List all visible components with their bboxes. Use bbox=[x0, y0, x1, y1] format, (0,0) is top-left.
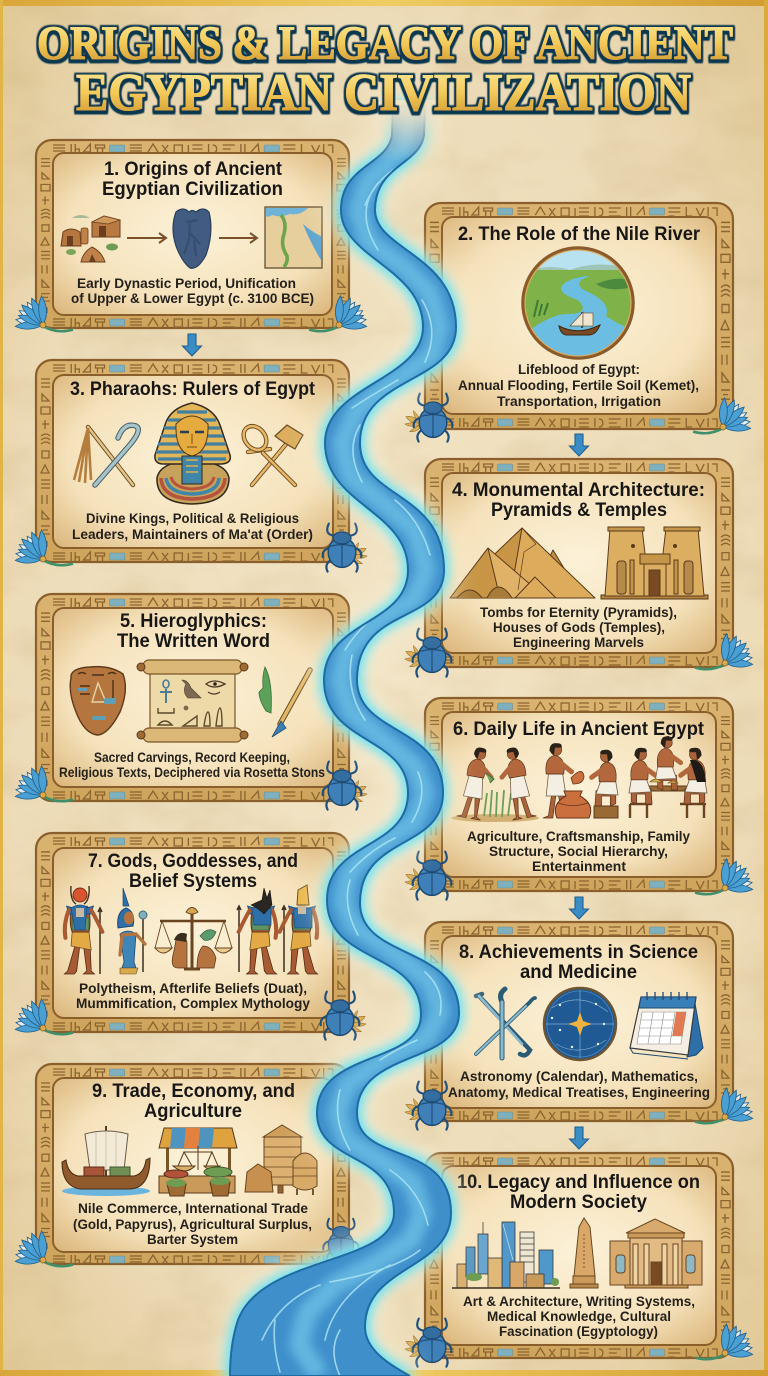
description 4: Tombs for Eternity (Pyramids), bbox=[480, 605, 677, 620]
icon: mud brick huts bbox=[61, 215, 120, 262]
description 9: (Gold, Papyrus), Agricultural Surplus, bbox=[73, 1217, 312, 1232]
heading 5: The Written Word bbox=[117, 631, 270, 652]
description 1: of Upper & Lower Egypt (c. 3100 BCE) bbox=[71, 291, 314, 306]
heading 5 bbox=[117, 611, 270, 652]
lotus 4 bbox=[695, 634, 753, 669]
panel 2: Nile river bbox=[405, 203, 751, 442]
description 2 bbox=[458, 362, 699, 409]
frame 2 bbox=[425, 203, 733, 429]
description 9: Nile Commerce, International Trade bbox=[78, 1201, 308, 1216]
description 6 bbox=[467, 829, 690, 874]
description 4: Engineering Marvels bbox=[513, 635, 644, 650]
lotus left bbox=[15, 296, 73, 331]
leaves 3 bbox=[349, 543, 367, 564]
leaves 10 bbox=[405, 1336, 423, 1357]
frame 3 bbox=[36, 360, 349, 562]
arrow 6 to 8 bbox=[570, 897, 588, 919]
lotus 6 bbox=[695, 859, 753, 894]
icon: map of the Nile bbox=[265, 207, 322, 268]
scarab 2 bbox=[414, 394, 452, 442]
lotus 10 bbox=[695, 1324, 753, 1359]
frame 8 bbox=[425, 922, 733, 1121]
description 1 bbox=[71, 276, 314, 306]
heading 5: 5. Hieroglyphics: bbox=[120, 611, 267, 632]
description 8: Anatomy, Medical Treatises, Engineering bbox=[448, 1085, 710, 1100]
panel 8: science and medicine bbox=[405, 922, 753, 1130]
heading 2: 2. The Role of the Nile River bbox=[458, 224, 701, 245]
description 5: Sacred Carvings, Record Keeping, bbox=[94, 750, 290, 765]
river top fade bbox=[372, 100, 442, 162]
description 3: Leaders, Maintainers of Ma'at (Order) bbox=[72, 527, 313, 542]
description 8 bbox=[448, 1069, 710, 1100]
description 6: Structure, Social Hierarchy, bbox=[489, 844, 668, 859]
icon: obelisk bbox=[570, 1218, 598, 1288]
icon: Narmer palette bbox=[173, 209, 211, 268]
title: EGYPTIAN CIVILIZATION bbox=[76, 64, 691, 122]
lotus 2 bbox=[693, 398, 751, 433]
icon: medical tools bbox=[476, 989, 535, 1058]
icon: god Anubis bbox=[237, 888, 277, 974]
icon: family at table bbox=[629, 736, 707, 818]
description 2: Transportation, Irrigation bbox=[497, 394, 661, 409]
icon: crook and flail bbox=[74, 425, 138, 485]
heading 7: 7. Gods, Goddesses, and bbox=[88, 851, 298, 872]
scarab 3 bbox=[323, 524, 361, 572]
description 10 bbox=[463, 1294, 695, 1339]
heading 10 bbox=[457, 1172, 700, 1213]
scarab 6 bbox=[413, 852, 451, 900]
heading 1 bbox=[102, 159, 283, 200]
description 4 bbox=[480, 605, 677, 650]
icon: god Horus bbox=[280, 885, 318, 974]
heading 10: Modern Society bbox=[510, 1192, 647, 1213]
icon: writing brush bbox=[272, 670, 310, 737]
icon: temple pylons bbox=[601, 527, 708, 599]
leaves 6 bbox=[405, 869, 423, 890]
description 2: Annual Flooding, Fertile Soil (Kemet), bbox=[458, 378, 699, 393]
icon: farmers bbox=[451, 746, 539, 822]
panel 5: hieroglyphics bbox=[15, 594, 367, 810]
arrow: huts to palette bbox=[127, 233, 166, 243]
frame 1 bbox=[36, 140, 349, 328]
lotus right bbox=[309, 296, 367, 331]
icon: museum building bbox=[610, 1219, 702, 1288]
arrow: palette to map bbox=[219, 233, 257, 243]
icon: market stall bbox=[159, 1128, 237, 1196]
icon: potters bbox=[543, 743, 618, 818]
frame 5 bbox=[36, 594, 349, 801]
description 6: Agriculture, Craftsmanship, Family bbox=[467, 829, 690, 844]
description 8: Astronomy (Calendar), Mathematics, bbox=[460, 1069, 698, 1084]
frame 4 bbox=[425, 459, 733, 667]
description 4: Houses of Gods (Temples), bbox=[493, 620, 665, 635]
scarab 8 bbox=[413, 1082, 451, 1130]
frame 7 bbox=[36, 833, 349, 1032]
scarab 5 bbox=[323, 762, 361, 810]
heading 4: 4. Monumental Architecture: bbox=[452, 480, 705, 501]
heading 6: 6. Daily Life in Ancient Egypt bbox=[453, 719, 705, 740]
scarab 4 bbox=[413, 629, 451, 677]
leaves 5 bbox=[349, 781, 367, 802]
leaves 8 bbox=[405, 1099, 423, 1120]
panel 6: daily life bbox=[405, 698, 753, 900]
icon: Tutankhamun mask bbox=[155, 403, 230, 504]
heading 1: Egyptian Civilization bbox=[102, 179, 283, 200]
icon: weighing scales bbox=[155, 908, 232, 969]
Nile river bbox=[230, 106, 459, 1376]
icon: trading ship bbox=[62, 1126, 150, 1196]
heading 1: 1. Origins of Ancient bbox=[104, 159, 283, 180]
frame 10 bbox=[425, 1153, 733, 1358]
scarab 10 bbox=[413, 1319, 451, 1367]
description 7: Polytheism, Afterlife Beliefs (Duat), bbox=[79, 981, 307, 996]
heading 3: 3. Pharaohs: Rulers of Egypt bbox=[70, 379, 316, 400]
heading 8: and Medicine bbox=[520, 962, 637, 983]
description 10: Fascination (Egyptology) bbox=[499, 1324, 658, 1339]
icon: goddess Isis bbox=[118, 888, 147, 974]
description 2: Lifeblood of Egypt: bbox=[518, 362, 640, 377]
arrow 1 to 3 bbox=[182, 334, 202, 356]
heading 4 bbox=[452, 480, 705, 521]
panel 10: legacy bbox=[405, 1153, 753, 1367]
icon: ankh and hoe bbox=[239, 422, 303, 485]
panel 1: origins bbox=[15, 140, 367, 331]
description 9: Barter System bbox=[147, 1232, 238, 1247]
icon: star disk bbox=[544, 988, 616, 1060]
icon: granaries and sacks bbox=[245, 1125, 317, 1195]
heading 7 bbox=[88, 851, 298, 892]
heading 8: 8. Achievements in Science bbox=[459, 942, 698, 963]
description 6: Entertainment bbox=[532, 859, 627, 874]
panel 4: architecture bbox=[405, 459, 753, 677]
description 9 bbox=[73, 1201, 312, 1247]
arrow 2 to 4 bbox=[570, 434, 588, 456]
description 5: Religious Texts, Deciphered via Rosetta Stons bbox=[59, 765, 325, 780]
panel 3: pharaohs bbox=[15, 360, 367, 572]
icon: papyrus scroll bbox=[137, 660, 248, 742]
panel 7: gods bbox=[15, 833, 366, 1040]
leaves 4 bbox=[405, 646, 423, 667]
lotus 9 bbox=[15, 1231, 73, 1266]
description 1: Early Dynastic Period, Unification bbox=[77, 276, 296, 291]
scarab 9 bbox=[323, 1219, 359, 1263]
leaves 2 bbox=[405, 411, 423, 432]
lotus 3 bbox=[15, 530, 73, 565]
icon: calendar bbox=[630, 992, 703, 1059]
heading 7: Belief Systems bbox=[129, 871, 257, 892]
lotus 8 bbox=[695, 1088, 753, 1123]
description 10: Medical Knowledge, Cultural bbox=[487, 1309, 671, 1324]
heading 9: 9. Trade, Economy, and bbox=[92, 1081, 295, 1102]
description 3 bbox=[72, 511, 313, 542]
frame 9 bbox=[36, 1064, 349, 1264]
title bbox=[37, 17, 733, 122]
arrow 8 to 10 bbox=[570, 1127, 588, 1149]
icon: Nile landscape medallion bbox=[520, 245, 640, 362]
icon: reed feather bbox=[259, 667, 271, 713]
heading 8 bbox=[459, 942, 698, 983]
icon: modern skyline bbox=[452, 1222, 560, 1288]
scarab 7 bbox=[321, 992, 359, 1040]
icon: carved tablet bbox=[70, 667, 125, 735]
lotus 5 bbox=[15, 766, 73, 801]
heading 10: 10. Legacy and Influence on bbox=[457, 1172, 700, 1193]
description 7 bbox=[76, 981, 310, 1011]
heading 9 bbox=[92, 1081, 295, 1122]
icon: pyramids bbox=[450, 528, 595, 598]
lotus 7 bbox=[15, 999, 73, 1034]
description 7: Mummification, Complex Mythology bbox=[76, 996, 310, 1011]
heading 4: Pyramids & Temples bbox=[491, 500, 667, 521]
heading 9: Agriculture bbox=[144, 1101, 242, 1122]
icon: god Hathor bbox=[64, 886, 102, 974]
description 3: Divine Kings, Political & Religious bbox=[86, 511, 299, 526]
description 5 bbox=[59, 750, 325, 780]
description 10: Art & Architecture, Writing Systems, bbox=[463, 1294, 695, 1309]
panel 9: trade bbox=[15, 1064, 359, 1266]
leaves 7 bbox=[348, 1011, 366, 1032]
frame 6 bbox=[425, 698, 733, 891]
